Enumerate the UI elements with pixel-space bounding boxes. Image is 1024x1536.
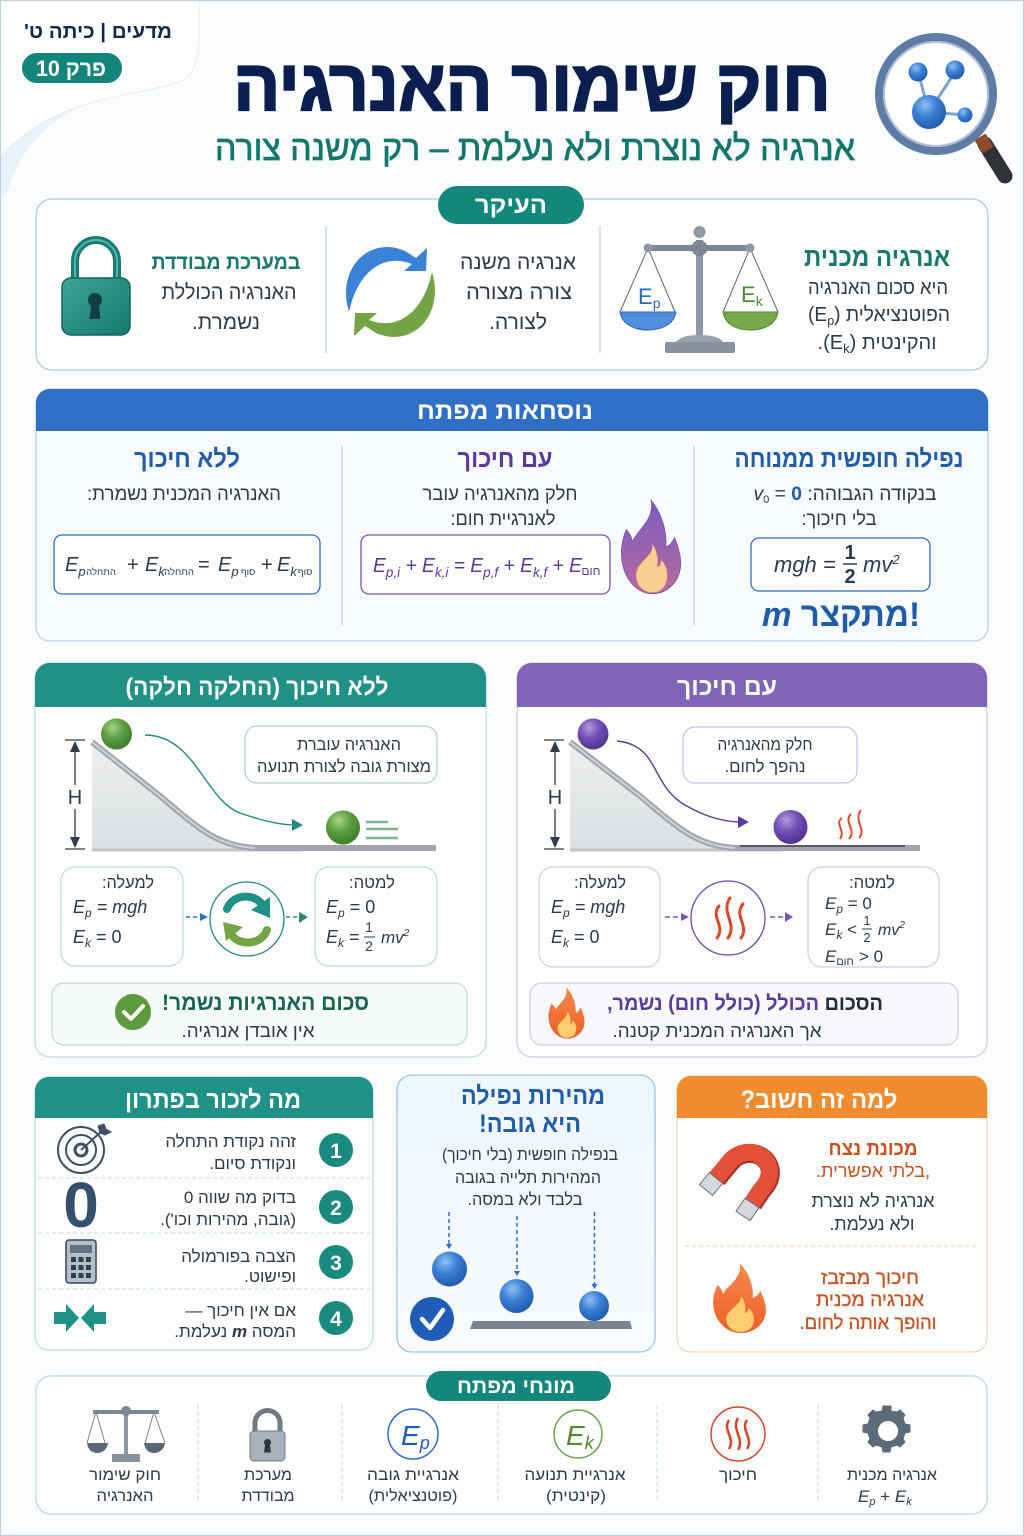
text block: mechanical energy [804,242,950,356]
text block: mechanical energy: k [843,341,850,356]
title: חוק שימור האנרגיה [234,46,830,126]
box: at bottom: E [825,947,837,966]
diagram: ramp with purple ball [544,718,920,850]
box: at bottom [808,867,939,968]
heading: fall speed [461,1082,605,1138]
column: free fall from rest: = [769,484,791,505]
heading: fall speed: היא גובה! [479,1110,581,1138]
icon: balance scale Ep Ek: E [741,282,756,307]
term: isolated system: מערכת [244,1467,292,1484]
text block: perpetual motion: מכונת נצח [828,1138,918,1160]
icon: magnifier with molecule [879,37,1005,176]
callout: total with heat [530,983,958,1045]
panel: why it matters [677,1076,987,1352]
step 4: 4 [330,1308,342,1331]
icon: flame inner [636,544,667,592]
box: at bottom: E [326,927,338,947]
step 1: זהה נקודת התחלה [165,1132,296,1151]
icon: orange flame [713,1263,766,1333]
formula: mgh [751,538,930,591]
panel: fall speed [397,1075,655,1352]
box: at bottom: 2 [403,928,410,939]
formula: no friction: סוף [241,567,255,578]
subtitle: אנרגיה לא נוצרת ולא נעלמת – רק משנה צורה [215,129,855,168]
term: kinetic energy: E [566,1420,585,1451]
term: potential energy [367,1409,459,1505]
box: at bottom: = 0 [843,894,872,913]
column: no friction: ללא חיכוך [134,445,240,473]
box: at bottom: 2 [863,930,871,945]
term: mechanical energy: E [858,1487,869,1506]
icon: calculator [66,1240,96,1283]
box: at bottom: < [842,920,857,939]
box: at top [61,867,183,966]
heading: no friction: ללא חיכוך (החלקה חלקה) [126,674,388,701]
icon: teal padlock [62,240,130,335]
term: potential energy: אנרגיית גובה [367,1467,459,1484]
box: at bottom: 2 [898,920,905,931]
box: at bottom: p [835,902,843,916]
callout: heat [683,727,857,783]
formula: no friction: + [261,554,273,576]
column: no friction [54,445,320,594]
formula: friction: + E [400,555,436,577]
term: isolated system: מבודדת [242,1488,294,1505]
column: free fall from rest: בנקודה הגבוהה: v [754,484,935,505]
step 2: בדוק מה שווה 0 [184,1188,296,1207]
box: at top: = 0 [569,927,600,947]
heading pill: key terms [426,1371,611,1401]
column: with friction: חלק מהאנרגיה עובר [422,484,578,505]
formula: friction: k,f [533,564,549,580]
callout: total conserved [52,983,467,1045]
box: at bottom: E [326,897,338,917]
box: at bottom: p [337,906,345,920]
term: kinetic energy: (קינטית) [546,1488,606,1505]
callout: energy moves: מצורת גובה לצורת תנועה [257,757,431,776]
heading pill: key terms: מונחי מפתח [457,1375,575,1398]
box: at top: E [73,897,85,917]
formula: friction: p,f [482,564,500,580]
text block: perpetual motion: ,בלתי אפשרית. [816,1161,930,1181]
formula: mgh: mgh = [774,552,836,577]
term: kinetic energy: k [585,1433,595,1453]
course tag: פרק 10 [36,56,106,81]
icon: arrows inward [54,1304,106,1332]
callout: heat: חלק מהאנרגיה [718,735,812,754]
diagram: falling balls [432,1212,632,1329]
formula: friction: E [373,555,386,577]
column: free fall from rest: 0 [763,494,769,506]
heading pill: essence [438,186,584,224]
icon: purple flame [621,500,681,594]
box: at top: למעלה: [102,873,154,892]
text block: fall speed: בנפילה חופשית (בלי חיכוך) [442,1145,618,1164]
term: mechanical energy: + [875,1487,895,1506]
icon: target [58,1124,111,1173]
formula: friction [361,535,610,594]
step 3: הצבה בפורמולה [181,1247,296,1266]
icon: balance scale Ep Ek: k [756,293,764,309]
formula: no friction: E [218,554,231,576]
callout: total with heat: אך האנרגיה המכנית קטנה. [612,1021,822,1041]
panel: key terms [36,1371,987,1514]
panel: key formulas [36,389,988,641]
text block: mechanical energy: אנרגיה מכנית [804,242,950,272]
course tag: מדעים | כיתה ט' [24,21,172,43]
heading: no friction [35,663,486,707]
text block: mechanical energy: והקינטית (E [830,332,936,354]
term: conservation law: חוק שימור [89,1467,161,1484]
formula: friction: p,i [385,564,401,580]
formula: friction: חום [581,564,601,578]
icon: blue check [410,1297,454,1341]
step 2: (גובה, מהירות וכו'). [160,1210,296,1229]
text block: isolated system: האנרגיה הכוללת [162,281,296,304]
icon: cycle arrows [346,247,435,337]
heading: what to remember: מה לזכור בפתרון [125,1086,301,1114]
arrow: to heat [665,913,689,921]
step 2 [160,1188,353,1229]
heading pill: essence: העיקר [475,192,547,219]
heading: fall speed: מהירות נפילה [461,1082,605,1110]
formula: no friction [54,535,320,594]
diagram: ramp with purple ball: H [548,787,562,809]
box: at bottom: = 0 [345,897,375,917]
text block: mechanical energy: ). [818,332,830,354]
box: at bottom [315,867,437,966]
formula: friction: + E [547,555,583,577]
heading: with friction: עם חיכוך [677,673,777,701]
step 1: 1 [330,1140,342,1163]
box: at bottom: = [344,927,360,947]
term: mechanical energy: אנרגיה מכנית [847,1467,937,1484]
formula: friction: k,i [435,564,449,580]
box: at bottom: למטה: [849,873,895,892]
text block: perpetual motion [812,1138,935,1234]
box: at top: E [551,927,563,947]
callout: total with heat: הסכום הכולל (כולל חום) נשמר, [607,992,883,1015]
term: friction: חיכוך [719,1467,757,1484]
step 2: 2 [330,1197,342,1220]
diagram: ramp with green ball: H [68,787,82,809]
icon: magnet [700,1152,770,1221]
step 3: 3 [330,1252,342,1275]
term: mechanical energy [847,1406,937,1508]
diagram: ramp with green ball [65,718,436,850]
text block: fall speed [442,1145,618,1209]
text block: mechanical energy: הפוטנציאלית (E [814,304,955,326]
box: at bottom: חום [836,956,854,968]
term: kinetic energy [524,1410,626,1505]
formula: no friction: E [277,554,290,576]
box: at bottom: > 0 [859,947,883,966]
box: at top: k [85,936,92,950]
formula: friction: = E [448,555,484,577]
panel: no friction ramp [35,663,486,1057]
box: at top: = mgh [92,897,147,917]
term: kinetic energy: אנרגיית תנועה [524,1467,626,1484]
callout: total conserved: אין אובדן אנרגיה. [182,1021,315,1041]
text block: energy changes form: צורה מצורה [466,281,572,304]
panel: with friction ramp [517,663,987,1057]
text block: friction wastes: חיכוך מבזבז [821,1268,919,1289]
term: conservation law: האנרגיה [96,1488,154,1505]
formula: mgh: 1 [844,542,856,564]
box: at top: למעלה: [574,873,626,892]
icon: conversion circle [210,882,284,956]
term: potential energy: p [419,1433,430,1453]
column: no friction: האנרגיה המכנית נשמרת: [87,484,281,505]
text block: energy changes form: אנרגיה משנה [460,251,576,274]
callout: heat: נהפך לחום. [724,757,806,776]
formula: no friction: התחלה [86,566,116,578]
callout: energy moves: האנרגיה עוברת [297,735,401,754]
column: with friction: עם חיכוך [458,445,552,473]
course tag [22,21,172,83]
arrow: to bottom state [770,912,793,922]
text block: isolated system [152,251,300,334]
icon: balance scale Ep Ek [620,226,778,353]
formula: no friction: k [158,564,166,579]
icon: big zero: 0 [63,1169,99,1241]
box: at bottom: 1 [863,913,871,928]
box: at bottom: k [338,936,345,950]
heading: why it matters [677,1076,987,1118]
callout: energy moves [245,726,437,783]
box: at top: p [562,906,570,920]
term: mechanical energy: p [868,1496,875,1508]
text block: perpetual motion: אנרגיה לא נוצרת [812,1191,935,1211]
column: free fall from rest: 0 [791,484,802,505]
text block: mechanical energy: היא סכום האנרגיה [808,277,948,299]
column: free fall from rest [734,445,964,634]
heading: with friction [517,663,987,707]
formula: no friction: p [77,564,86,579]
box: at top: = mgh [570,897,625,917]
text block: friction wastes: אנרגיה מכנית [816,1290,924,1311]
text block: energy changes form: לצורה. [489,311,547,334]
step 4: המסה m נעלמת. [174,1322,296,1341]
text block: perpetual motion: ולא נעלמת. [830,1214,914,1234]
formula: no friction: + [127,554,139,576]
formula: no friction: התחלה [164,566,194,578]
formula: no friction: E [145,554,158,576]
panel: what to remember [35,1077,373,1350]
box: at bottom: E [825,920,836,939]
text block: fall speed: המהירות תלייה בגובה [455,1168,601,1187]
box: at bottom: E [825,894,836,913]
formula: no friction: k [290,564,298,579]
text block: friction wastes: והופך אותה לחום. [800,1313,936,1334]
box: at top: E [551,897,563,917]
box: at bottom: 2 [365,938,373,954]
step 1: ונקודת סיום. [209,1154,296,1173]
box: at top: k [563,936,570,950]
step 4: אם אין חיכוך — [185,1301,296,1320]
term: friction [711,1407,765,1484]
icon: balance scale Ep Ek: E [638,284,653,309]
box: at bottom: 1 [365,919,373,935]
callout: total conserved: סכום האנרגיות נשמר! [162,990,369,1015]
formula: no friction: E [65,554,78,576]
panel: the essence [36,186,988,370]
formula: no friction: = [198,554,210,576]
step 3: ופישוט. [244,1267,296,1286]
box: at bottom: למטה: [349,873,395,892]
term: potential energy: E [401,1420,420,1451]
heading: key formulas: נוסחאות מפתח [417,398,593,425]
column: with friction: לאנרגיית חום: [450,509,556,530]
box: at bottom: k [836,928,843,942]
term: mechanical energy: E [895,1487,906,1506]
formula: friction: + E [498,555,534,577]
text block: isolated system: במערכת מבודדת [152,251,300,274]
box: at top [539,867,660,967]
formula: no friction: p [230,564,239,579]
text block: mechanical energy: p [827,313,834,328]
formula: mgh: mv [863,552,892,577]
box: at bottom: mv [381,928,404,947]
formula: no friction: סוף [298,567,312,578]
text block: isolated system: נשמרת. [192,311,260,334]
step 1 [165,1132,353,1173]
heading: why it matters: למה זה חשוב? [740,1086,898,1114]
column: free fall from rest: m מתקצר! [762,596,920,634]
box: at top: = 0 [91,927,122,947]
column: with friction [361,445,681,594]
heading: what to remember [35,1077,373,1118]
box: at bottom: mv [878,922,899,939]
text block: friction wastes [800,1268,936,1334]
box: at top: E [73,927,85,947]
box: at top: p [84,906,92,920]
step 4 [174,1301,353,1341]
formula: mgh: 2 [844,566,856,588]
heading: key formulas [36,389,988,431]
arrow: to bottom state [286,912,308,923]
arrow: to cycle [186,913,208,921]
icon: heat circle [691,881,765,955]
column: free fall from rest: נפילה חופשית ממנוחה [734,445,964,473]
term: isolated system [242,1410,294,1505]
formula: mgh: 2 [891,552,900,567]
text block: mechanical energy: ) [808,304,815,326]
term: mechanical energy: k [906,1496,912,1508]
text block: energy changes form [460,251,576,334]
step 3 [181,1245,353,1286]
column: free fall from rest: בלי חיכוך: [802,509,876,530]
term: conservation law [87,1406,165,1505]
term: potential energy: (פוטנציאלית) [368,1487,458,1505]
icon: balance scale Ep Ek: p [653,295,661,311]
text block: fall speed: בלבד ולא במסה. [468,1190,582,1209]
